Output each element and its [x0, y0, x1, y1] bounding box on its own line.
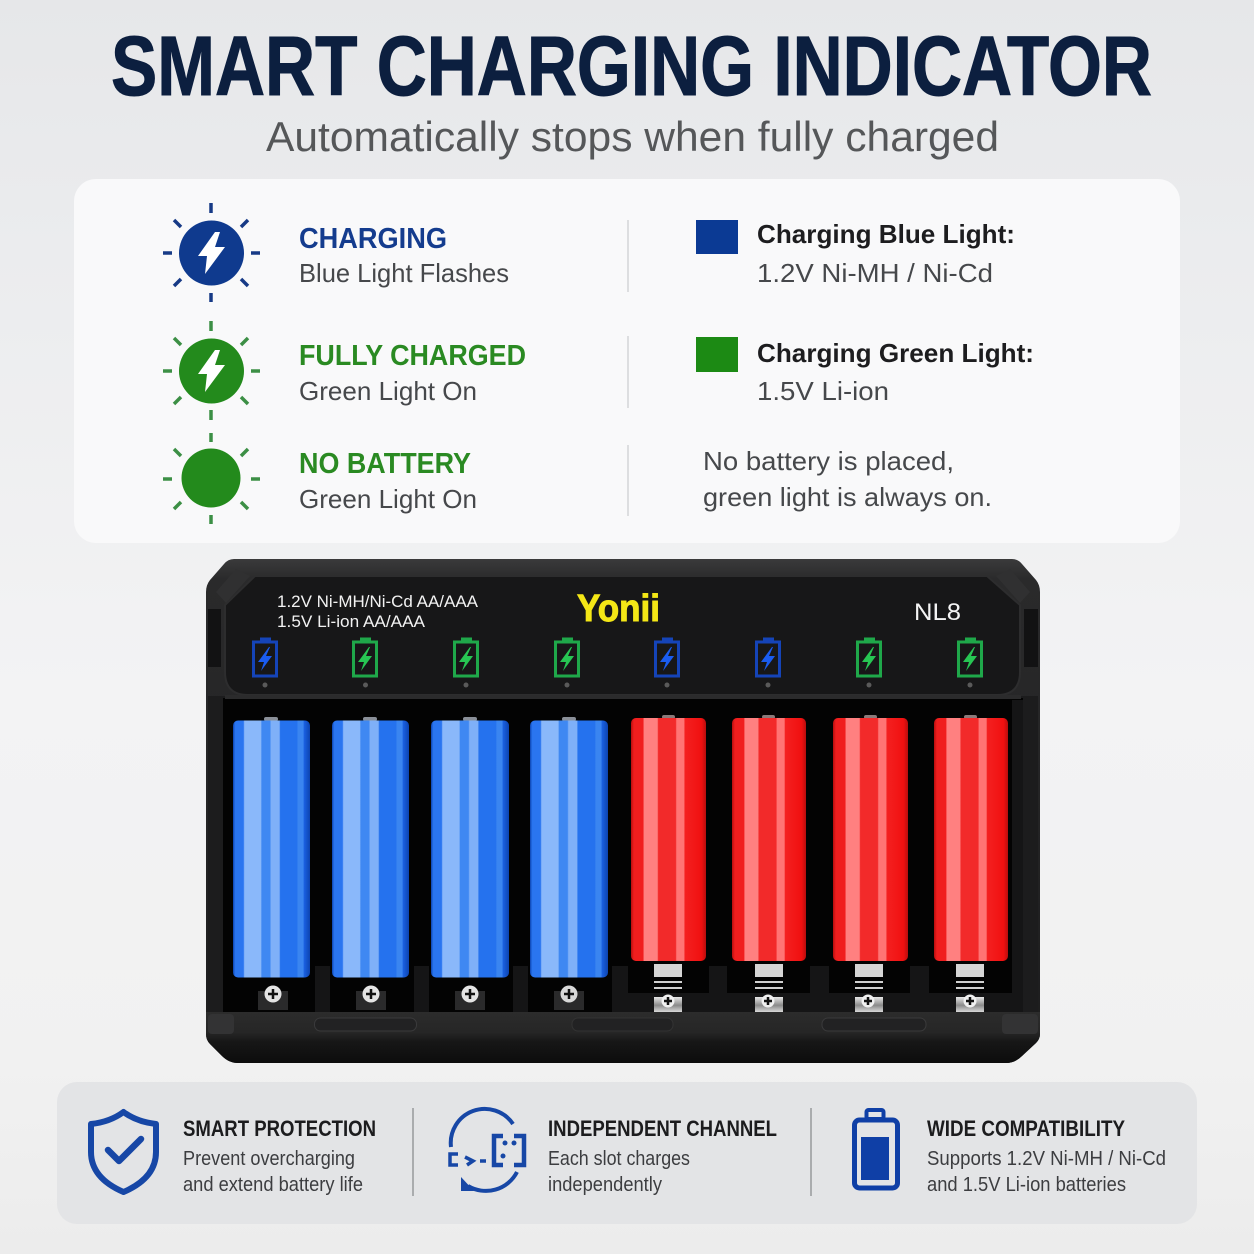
- feature: independent channel: INDEPENDENT CHANNEL: [548, 1116, 777, 1141]
- note: no battery: [703, 446, 992, 512]
- feature: smart protection: and extend battery life: [183, 1174, 363, 1196]
- legend: blue swatch and label: Charging Blue Light:: [757, 219, 1015, 249]
- indicator: slot 5 blue: [656, 638, 678, 688]
- legend: blue swatch and label: 1.2V Ni-MH / Ni-Cd: [757, 258, 993, 288]
- red batteries: [631, 715, 1008, 961]
- icon: charging blue sun: [163, 203, 260, 302]
- icon: battery: [854, 1110, 898, 1188]
- status: no battery: [299, 448, 477, 514]
- feature: wide compatibility: WIDE COMPATIBILITY: [927, 1116, 1125, 1141]
- spec label: [277, 593, 478, 631]
- charger body: [206, 559, 1040, 1063]
- feature: wide compatibility: and 1.5V Li-ion batteries: [927, 1174, 1126, 1196]
- indicator: slot 8 green: [958, 638, 982, 688]
- indicator: slot 2 green: [354, 638, 376, 688]
- indicator: slot 1 blue: [254, 638, 276, 688]
- brand logo: Yonii: [577, 588, 660, 630]
- legend: green swatch and label: [696, 337, 1034, 406]
- spec label: 1.5V Li-ion AA/AAA: [277, 613, 425, 631]
- feature: independent channel: [548, 1116, 777, 1196]
- charger front lip: [206, 1012, 1040, 1063]
- spec label: 1.2V Ni-MH/Ni-Cd AA/AAA: [277, 593, 478, 611]
- feature: smart protection: [183, 1116, 376, 1196]
- indicator: slot 3 green: [454, 638, 478, 688]
- red slot spring contacts: [654, 964, 984, 1012]
- feature: independent channel: independently: [548, 1174, 662, 1196]
- icon: fully charged green sun: [163, 321, 260, 420]
- status: fully charged: [299, 340, 526, 406]
- legend: blue swatch and label: [696, 219, 1015, 288]
- indicator: slot 4 green: [556, 638, 578, 688]
- status: charging: [299, 223, 509, 288]
- feature: wide compatibility: Supports 1.2V Ni-MH / Ni-Cd: [927, 1148, 1166, 1170]
- blue slot screw contacts: [258, 986, 584, 1010]
- status: no battery: Green Light On: [299, 484, 477, 514]
- model number: NL8: [914, 599, 961, 626]
- subtitle: Automatically stops when fully charged: [266, 113, 999, 160]
- status: fully charged: Green Light On: [299, 376, 477, 406]
- feature: wide compatibility: [927, 1116, 1166, 1196]
- slot dividers: [315, 700, 1023, 1012]
- control panel: [225, 576, 1021, 699]
- status: fully charged: FULLY CHARGED: [299, 340, 526, 372]
- indicator: slot 6 blue: [756, 638, 780, 688]
- note: no battery: green light is always on.: [703, 482, 992, 512]
- indicator: slot 7 green: [858, 638, 880, 688]
- status: charging: CHARGING: [299, 223, 447, 255]
- status: charging: Blue Light Flashes: [299, 258, 509, 288]
- status: no battery: NO BATTERY: [299, 448, 471, 480]
- battery bay interior: [223, 698, 1023, 1012]
- feature: smart protection: SMART PROTECTION: [183, 1116, 376, 1141]
- icon: no battery green sun: [163, 433, 260, 524]
- icon: shield with check: [91, 1112, 156, 1192]
- note: no battery: No battery is placed,: [703, 446, 954, 476]
- panel: feature strip: [57, 1082, 1197, 1224]
- legend: green swatch and label: Charging Green Light:: [757, 338, 1034, 368]
- feature: smart protection: Prevent overcharging: [183, 1148, 355, 1170]
- icon: independent channel cycle: [450, 1109, 524, 1191]
- feature: independent channel: Each slot charges: [548, 1148, 690, 1170]
- panel: light status legend: [74, 179, 1180, 543]
- charger product: [206, 559, 1040, 1063]
- legend: green swatch and label: 1.5V Li-ion: [757, 376, 889, 406]
- blue batteries: [233, 717, 608, 978]
